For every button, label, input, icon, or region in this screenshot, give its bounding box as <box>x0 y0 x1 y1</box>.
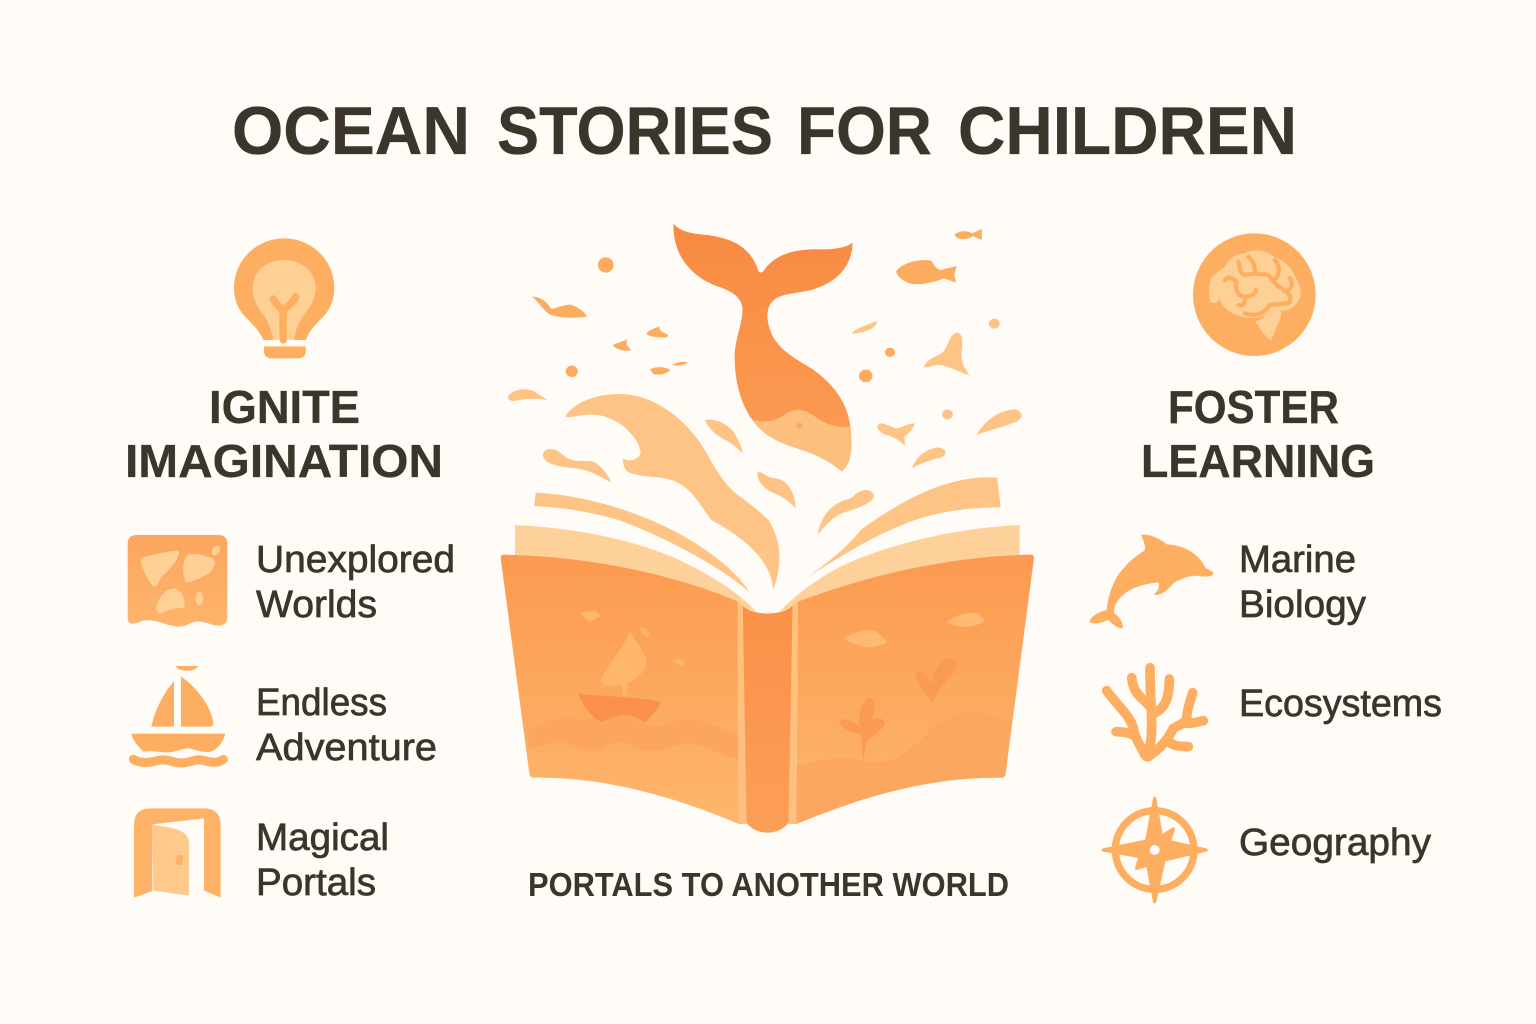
splash and sea creatures <box>508 223 1022 593</box>
label: unexplored worlds: Unexplored <box>256 539 455 581</box>
left cover <box>501 555 739 824</box>
label: marine biology <box>1239 539 1366 626</box>
heading: ignite imagination: IGNITE <box>209 381 360 433</box>
panel: ignite imagination <box>125 238 455 904</box>
icon: compass <box>1103 798 1206 902</box>
icon: brain <box>1193 233 1316 356</box>
icon: coral <box>1107 668 1203 757</box>
fish and droplets <box>532 229 982 382</box>
label: endless adventure: Endless <box>256 682 387 724</box>
panel: foster learning <box>1089 233 1442 902</box>
label: magical portals <box>256 817 389 904</box>
left cover scene: boat on waves <box>527 611 738 758</box>
icon: door portal <box>134 808 221 898</box>
spine <box>737 602 798 833</box>
icon: light bulb <box>234 238 334 358</box>
whale <box>674 223 852 472</box>
large wave <box>565 394 779 590</box>
book <box>501 525 1034 833</box>
title: OCEAN <box>232 93 470 169</box>
label: marine biology: Marine <box>1239 539 1356 581</box>
right cover <box>796 555 1034 824</box>
label: magical portals: Portals <box>256 862 376 904</box>
title: FOR <box>797 93 932 169</box>
illustration: open book with whale <box>501 223 1034 903</box>
right cover scene: coral and hills <box>796 613 1011 824</box>
label: marine biology: Biology <box>1239 584 1366 626</box>
heading: foster learning <box>1141 381 1375 487</box>
label: unexplored worlds: Worlds <box>256 584 377 626</box>
heading: foster learning: LEARNING <box>1141 435 1375 487</box>
title: CHILDREN <box>958 93 1297 169</box>
caption: PORTALS TO ANOTHER WORLD <box>528 866 1009 903</box>
label: unexplored worlds <box>256 539 455 626</box>
icon: map <box>128 535 227 626</box>
heading: foster learning: FOSTER <box>1168 381 1339 433</box>
icon: sailboat <box>131 666 225 763</box>
label: endless adventure: Adventure <box>256 727 437 769</box>
label: ecosystems: Ecosystems <box>1239 683 1442 725</box>
heading: ignite imagination: IMAGINATION <box>125 435 443 487</box>
heading: ignite imagination <box>125 381 443 487</box>
label: magical portals: Magical <box>256 817 389 859</box>
title <box>232 93 1297 169</box>
label: geography: Geography <box>1239 822 1431 864</box>
label: endless adventure <box>256 682 437 769</box>
title: STORIES <box>497 93 773 169</box>
page flaps <box>534 477 1001 593</box>
icon: dolphin <box>1089 535 1213 628</box>
